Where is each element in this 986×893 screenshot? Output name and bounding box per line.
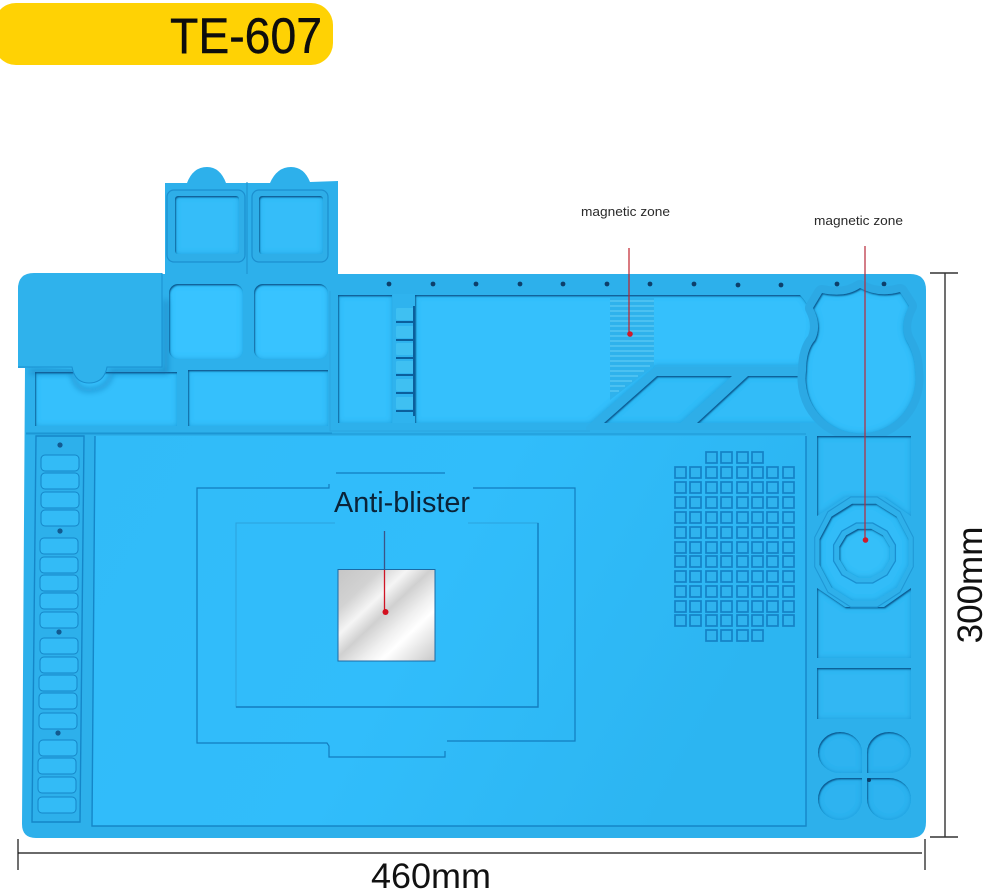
alignment frames (197, 473, 575, 757)
main work area frame (26, 434, 806, 826)
ribbed magnetic strip (610, 298, 654, 400)
callout: magnetic zone (dish): magnetic zone (814, 213, 903, 228)
callout: anti-blister: Anti-blister (334, 487, 471, 519)
comb dividers (393, 294, 415, 423)
strip slots (38, 455, 79, 813)
screw grid (675, 452, 794, 641)
anti-blister foil square (338, 570, 435, 661)
dimension: height 300mm (930, 273, 986, 837)
long tray with ridge (330, 291, 822, 431)
clover compartments (818, 732, 911, 820)
main work area (92, 436, 806, 826)
badge: model number (0, 3, 333, 65)
badge: model number: TE-607 (170, 8, 322, 64)
left parts strip (32, 436, 84, 822)
left lift flap with tab (18, 273, 166, 390)
callout: magnetic zone (dish) (814, 213, 903, 543)
clover centre hole (867, 778, 871, 782)
dodecagonal magnetic dish (815, 497, 913, 607)
mat body (18, 167, 926, 838)
callout: magnetic zone (strip): magnetic zone (581, 204, 670, 219)
callout: anti-blister (334, 487, 471, 615)
peg holes along the top edge (387, 282, 886, 287)
right column trays (817, 436, 911, 719)
lower-left trays (26, 370, 332, 433)
dimension: width 460mm (18, 839, 925, 893)
callout: magnetic zone (strip) (581, 204, 670, 337)
panel: silicone mat (18, 167, 926, 838)
top fold-out tray panel (167, 182, 328, 359)
shield-shaped round tray (806, 288, 916, 433)
diagonal ridge and angled compartments (586, 367, 800, 430)
